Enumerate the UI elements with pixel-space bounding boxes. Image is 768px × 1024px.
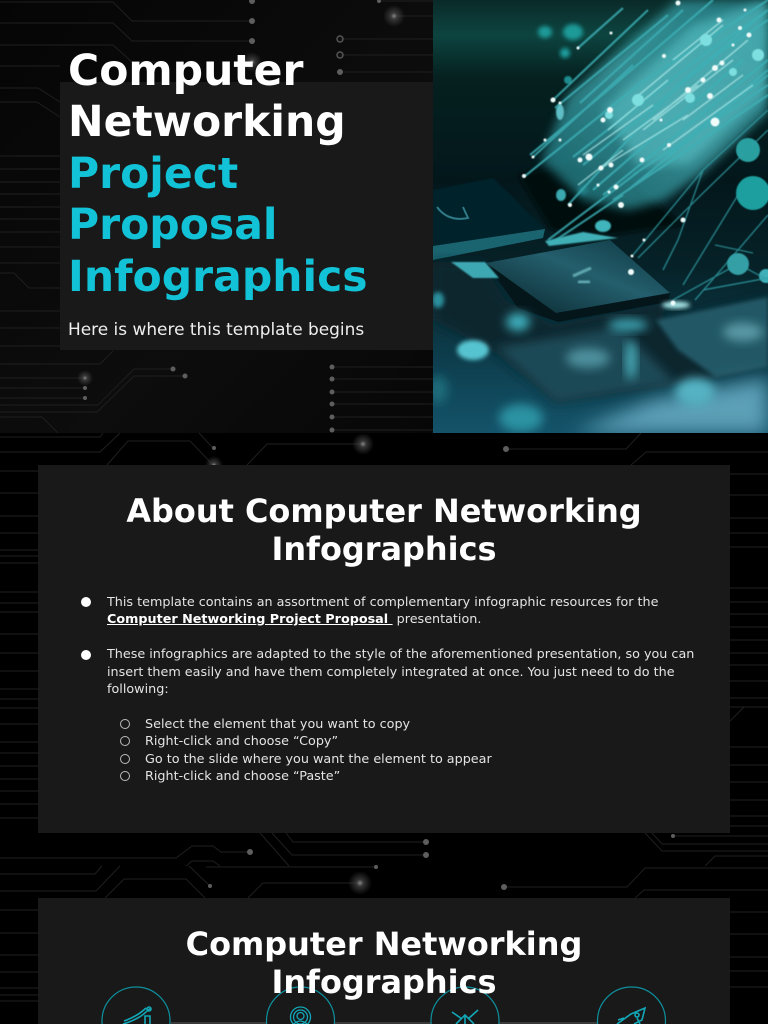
title: Computer	[68, 47, 303, 96]
bullet one	[81, 595, 658, 627]
icon: rocket	[617, 1008, 645, 1024]
sub-list of steps: Go to the slide where you want the element to appear	[145, 752, 492, 767]
photo: fiber optic strands over keyboard	[433, 0, 768, 433]
icon: person in rings	[290, 1007, 310, 1024]
bullet two: insert them easily and have them completely integrated at once. You just need to do the	[107, 664, 675, 680]
sub-list of steps	[120, 717, 492, 784]
bullet two: These infographics are adapted to the style of the aforementioned presentation, so you can	[107, 647, 694, 662]
bullet two	[81, 647, 694, 697]
icon: bug	[452, 1010, 478, 1024]
heading: about	[126, 492, 642, 568]
bullet two: following:	[107, 682, 169, 697]
title: Infographics	[68, 253, 368, 302]
panel: title background	[60, 82, 433, 350]
icon: growth chart	[123, 1007, 151, 1024]
title: Proposal	[68, 201, 277, 250]
sub-list of steps: Select the element that you want to copy	[145, 717, 410, 732]
heading: about: About Computer Networking	[126, 492, 642, 530]
title: Project	[68, 150, 238, 199]
panel: infographics	[38, 898, 730, 1024]
icon timeline	[101, 986, 666, 1024]
bullet one: Computer Networking Project Proposal presentation.	[107, 612, 481, 627]
heading: infographics	[186, 925, 582, 1001]
heading: about: Infographics	[271, 530, 497, 568]
keyboard keys	[428, 160, 768, 433]
title	[68, 47, 368, 302]
sub-list of steps: Right-click and choose “Copy”	[145, 734, 338, 749]
sub-list of steps: Right-click and choose “Paste”	[145, 769, 340, 784]
bullet one: This template contains an assortment of complementary infographic resources for the	[107, 595, 658, 610]
subtitle: Here is where this template begins	[68, 319, 364, 339]
fiber bundle	[522, 0, 768, 306]
heading: infographics: Computer Networking	[186, 925, 582, 963]
title: Networking	[68, 98, 346, 147]
panel: about	[38, 465, 730, 833]
heading: infographics: Infographics	[271, 963, 497, 1001]
